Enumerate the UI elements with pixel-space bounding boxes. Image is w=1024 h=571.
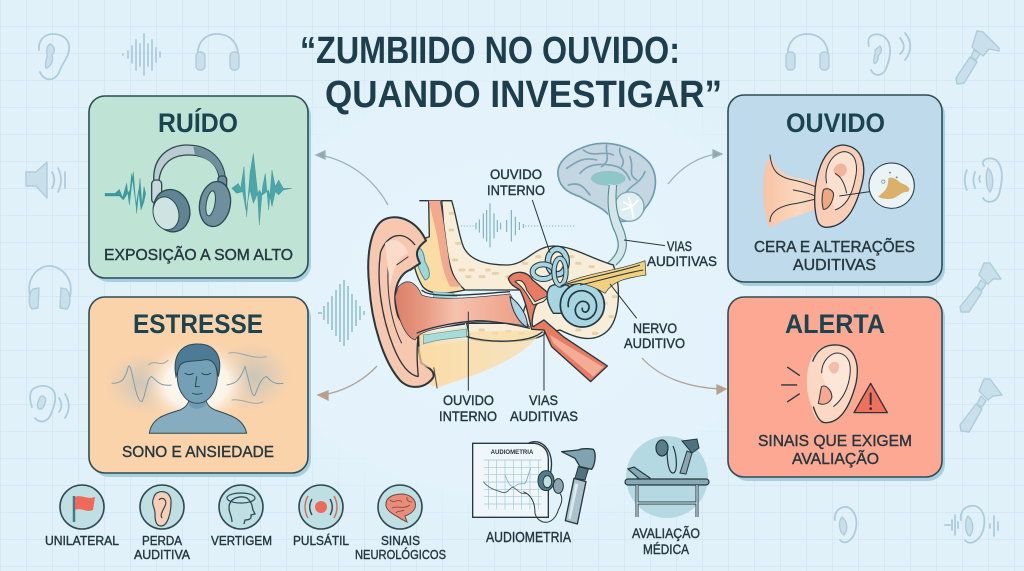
heading: ouvido: OUVIDO: [786, 108, 885, 138]
background icon: speaker: [26, 162, 65, 198]
background icon: ear with waves right: [965, 158, 1002, 202]
arrow: to ouvido: [668, 150, 722, 184]
background icon: otoscope right: [960, 263, 1001, 312]
sound wave left of ear: [318, 280, 364, 346]
caption: alerta: SINAIS QUE EXIGEM: [758, 433, 912, 450]
labels: vias auditivas right: VIAS: [667, 239, 692, 254]
labels: ouvido interno bottom: [439, 393, 497, 424]
panel: ruído: [89, 96, 311, 282]
icon: hearing loss ear: [140, 485, 184, 529]
label: avaliação médica: MÉDICA: [643, 542, 689, 557]
lower tissue: [418, 327, 545, 388]
labels: ouvido interno top: OUVIDO: [490, 167, 542, 182]
label: unilateral: UNILATERAL: [45, 533, 119, 548]
labels: ouvido interno bottom: INTERNO: [439, 409, 497, 424]
ear canal: [395, 282, 529, 340]
brain: [558, 143, 655, 265]
icon: calm face with waves: [105, 338, 292, 433]
labels: vias auditivas bottom: AUDITIVAS: [510, 409, 578, 424]
temporal bone: [442, 201, 618, 342]
icon: headphones with sound waves: [105, 145, 292, 236]
label: avaliação médica: [632, 526, 700, 557]
label: perda auditiva: [134, 533, 190, 562]
middle ear and eustachian tube: [508, 272, 607, 382]
background icon: headphones left: [29, 266, 71, 309]
title: [300, 30, 722, 116]
caption: ruído: EXPOSIÇÃO A SOM ALTO: [104, 244, 293, 264]
background icon: ear top left: [39, 34, 69, 79]
caption: alerta: [758, 433, 912, 468]
labels: nervo auditivo: AUDITIVO: [624, 336, 685, 351]
labels: ouvido interno bottom: OUVIDO: [443, 393, 494, 408]
background icon: small ear bottom: [835, 507, 856, 542]
audiogram label: AUDIOMETRIA: [491, 449, 534, 456]
labels: ouvido interno top: INTERNO: [487, 183, 545, 198]
background icon: ear with waves top right: [868, 33, 910, 75]
labels: vias auditivas right: AUDITIVAS: [647, 254, 717, 269]
icon: audiogram with headphones and otoscope: [473, 442, 595, 524]
auricle: [368, 217, 434, 387]
upper tissue: [413, 201, 465, 293]
label: perda auditiva: PERDA: [142, 533, 182, 548]
panel: ouvido: [728, 95, 945, 286]
eardrum: [510, 297, 527, 327]
icon: ear with earwax callout: [763, 145, 914, 228]
inner ear: [547, 284, 573, 313]
caption: estresse: SONO E ANSIEDADE: [122, 444, 274, 461]
panel: estresse: [89, 297, 311, 477]
background icon: headphones top right: [786, 34, 829, 70]
heading: alerta: ALERTA: [785, 309, 885, 339]
background icon: sound wave: [123, 34, 160, 75]
label: perda auditiva: AUDITIVA: [134, 547, 190, 562]
bone texture: [450, 213, 616, 333]
caption: ouvido: AUDITIVAS: [793, 257, 876, 274]
label leader lines: [468, 200, 665, 391]
background icon: ear with waves lower right: [945, 506, 998, 543]
label: sinais neurológicos: SINAIS: [381, 533, 420, 548]
label: sinais neurológicos: NEUROLÓGICOS: [355, 547, 446, 562]
arrow: to alerta: [642, 358, 726, 394]
icon: unilateral flag: [60, 485, 104, 529]
label: avaliação médica: AVALIAÇÃO: [632, 526, 700, 541]
title: “ZUMBIIDO NO OUVIDO:: [300, 30, 680, 72]
background icon: otoscope top right: [956, 31, 999, 84]
caption: alerta: AVALIAÇÃO: [792, 448, 879, 468]
arrow: to estresse: [318, 366, 377, 400]
icon: exam table: [625, 436, 709, 518]
icon: brain: [378, 485, 422, 529]
label: vertigem: VERTIGEM: [211, 533, 272, 548]
labels: nervo auditivo: [624, 321, 685, 351]
label: pulsátil: PULSÁTIL: [293, 533, 349, 548]
labels: nervo auditivo: NERVO: [633, 321, 677, 336]
background icon: ear with waves left: [30, 386, 69, 421]
caption: ouvido: CERA E ALTERAÇÕES: [754, 236, 915, 256]
background icon: otoscope lower right: [960, 379, 1002, 432]
auditory nerve: [561, 261, 646, 293]
labels: ouvido interno top: [487, 167, 545, 198]
icon: pulsatile: [299, 485, 343, 529]
icon: ear with warning sign: [782, 345, 887, 423]
labels: vias auditivas bottom: [510, 393, 578, 424]
wave above canal: [476, 203, 523, 247]
labels: vias auditivas bottom: VIAS: [529, 393, 558, 408]
title: QUANDO INVESTIGAR”: [325, 74, 722, 116]
background icon: headphones top left: [196, 34, 239, 70]
label: audiometria: AUDIOMETRIA: [486, 529, 571, 546]
label: sinais neurológicos: [355, 533, 446, 562]
caption: ouvido: [754, 236, 915, 274]
glow under canal: [418, 333, 540, 387]
central ear anatomy diagram: [368, 143, 665, 391]
heading: estresse: ESTRESSE: [133, 309, 263, 339]
panel: alerta: [728, 297, 945, 481]
labels: vias auditivas right: [647, 239, 717, 269]
heading: ruído: RUÍDO: [158, 107, 238, 138]
icon: vertigo head: [219, 485, 263, 529]
arrow: to ruído: [316, 151, 388, 205]
